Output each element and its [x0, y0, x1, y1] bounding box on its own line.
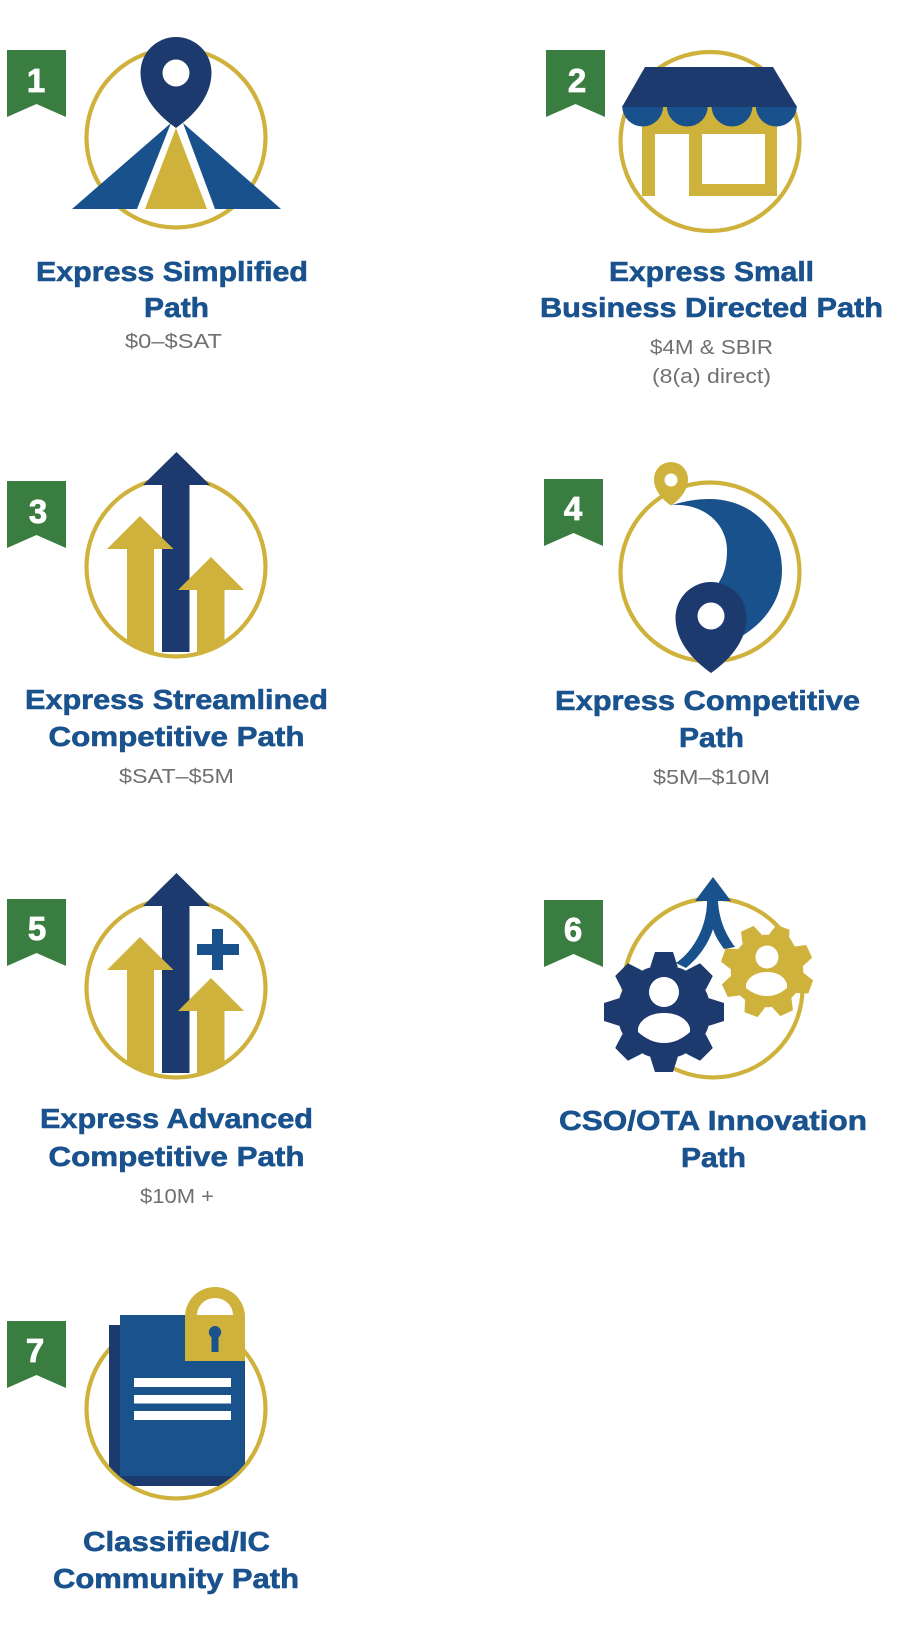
panel: path 7 Classified/IC Community: [7, 1287, 299, 1594]
icon: curved route between pins: [620, 462, 800, 673]
badge 7: [7, 1321, 66, 1388]
badge 3: 3: [29, 493, 47, 530]
title 5: Express Advanced: [40, 1103, 313, 1134]
title 4: Express Competitive: [555, 685, 860, 716]
title 7: Community Path: [53, 1563, 299, 1594]
panel: path 5 Express Advanced Competitive: [7, 873, 313, 1208]
badge 5: [7, 899, 66, 966]
badge 5: 5: [28, 910, 46, 947]
threshold 3: $SAT–$5M: [119, 766, 234, 788]
badge 4: [544, 479, 603, 546]
threshold 2: $4M & SBIR: [650, 337, 773, 359]
panel: path 6 CSO/OTA Innovation: [544, 877, 867, 1173]
title 6: [559, 1105, 867, 1173]
title 2: [540, 256, 883, 323]
badge 6: [544, 900, 603, 967]
title 3: [25, 684, 328, 752]
icon: gears with merging arrow: [604, 877, 827, 1078]
title 3: Competitive Path: [48, 721, 304, 752]
title 7: Classified/IC: [83, 1526, 270, 1557]
title 4: [555, 685, 860, 753]
title 2: Express Small: [609, 256, 814, 287]
icon: locked document: [86, 1287, 266, 1498]
badge 1: [7, 50, 66, 117]
title 1: Path: [144, 292, 209, 323]
title 4: Path: [679, 722, 744, 753]
threshold 5: $10M +: [140, 1186, 214, 1208]
title 2: Business Directed Path: [540, 292, 883, 323]
icon: storefront: [620, 52, 800, 231]
badge 4: 4: [564, 490, 583, 527]
panel: path 3 Express Streamlined Competitive: [7, 452, 328, 788]
threshold 1: $0–$SAT: [125, 331, 222, 353]
title 6: Path: [681, 1142, 746, 1173]
panel: path 2 Express Small Business Directed: [540, 50, 883, 388]
title 6: CSO/OTA Innovation: [559, 1105, 867, 1136]
panel: path 4 Express Competitive: [544, 462, 860, 789]
title 1: [36, 256, 308, 323]
badge 6: 6: [564, 911, 582, 948]
badge 2: 2: [568, 62, 586, 99]
icon: map pin on road: [72, 37, 281, 228]
title 3: Express Streamlined: [25, 684, 328, 715]
title 1: Express Simplified: [36, 256, 308, 287]
badge 1: 1: [27, 62, 45, 99]
threshold 2: (8(a) direct): [652, 366, 771, 388]
title 5: [40, 1103, 313, 1172]
icon: rising arrows with plus: [86, 873, 266, 1081]
panel: path 1 Express Simplified: [7, 37, 308, 353]
badge 7: 7: [26, 1332, 44, 1369]
badge 3: [7, 481, 66, 548]
threshold 2: [650, 337, 773, 388]
title 5: Competitive Path: [48, 1141, 304, 1172]
title 7: [53, 1526, 299, 1594]
icon: three rising arrows: [86, 452, 266, 660]
badge 2: [546, 50, 605, 117]
threshold 4: $5M–$10M: [653, 767, 770, 789]
